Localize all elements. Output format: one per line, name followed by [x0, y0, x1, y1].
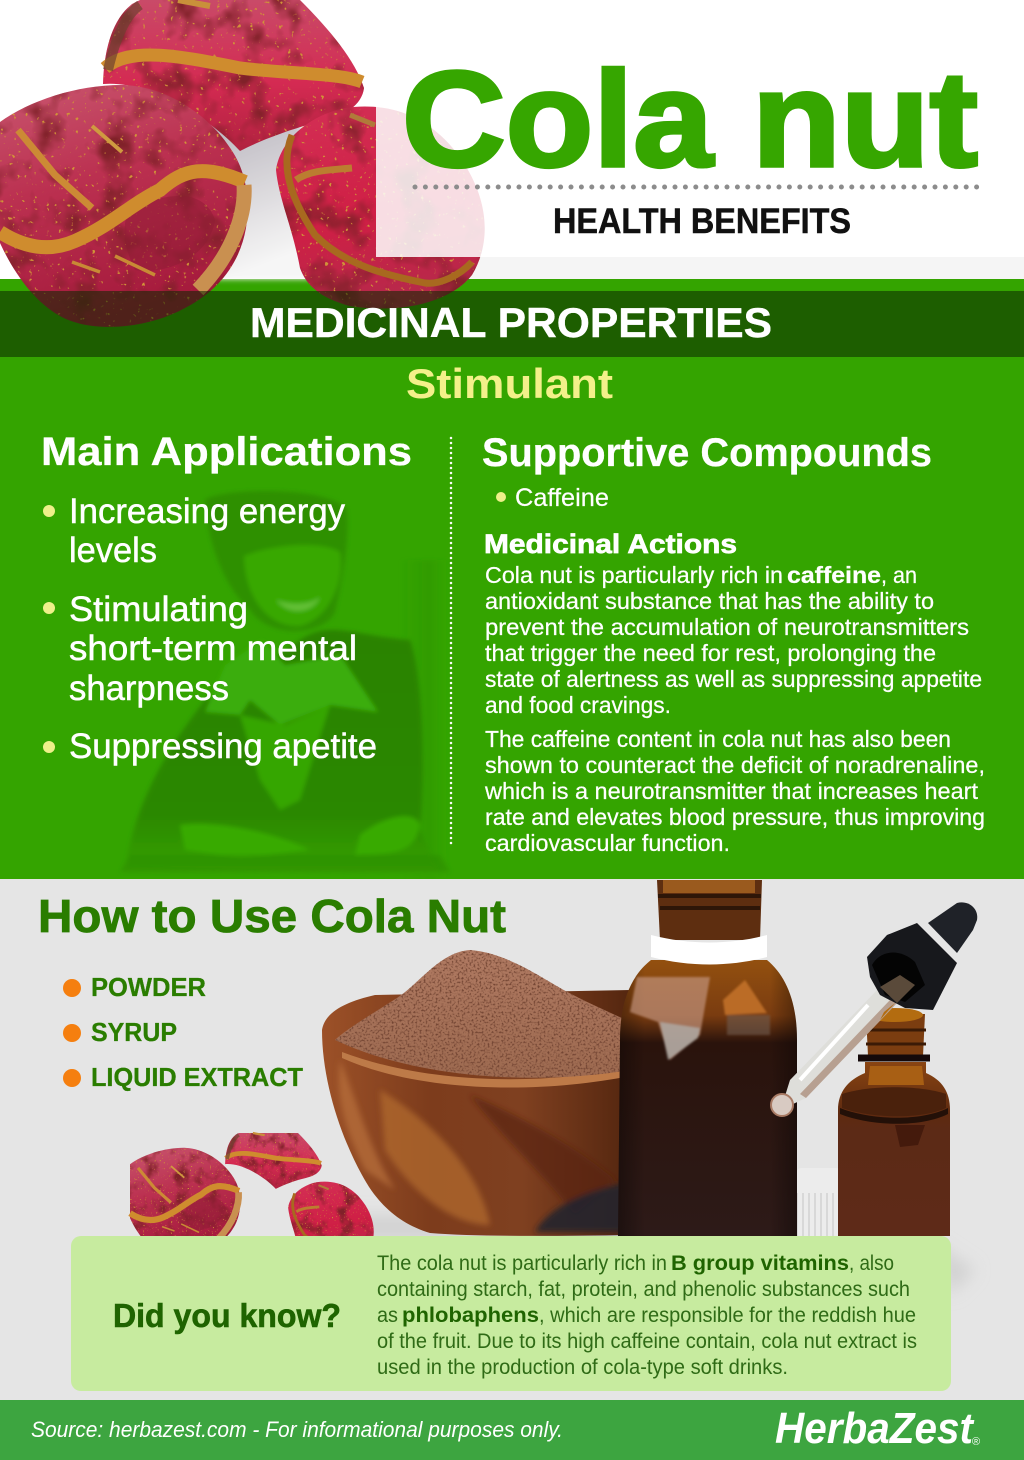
- cola nut shadow: [200, 110, 310, 279]
- section banner: [0, 291, 1024, 357]
- subtitle: HEALTH BENEFITS: [553, 202, 851, 241]
- dotted title divider: [415, 184, 977, 190]
- paragraph one: , an: [881, 562, 917, 588]
- title: [402, 43, 978, 195]
- paragraph one: caffeine: [787, 562, 881, 588]
- callout text: of the fruit. Due to its high caffeine contain, cola nut extract is: [377, 1329, 917, 1353]
- property label: Stimulant: [406, 360, 613, 407]
- paragraph two: shown to counteract the deficit of noradrenaline,: [485, 752, 985, 778]
- application: mental sharpness: sharpness: [69, 669, 229, 708]
- source note: Source: herbazest.com - For informational purposes only.: [31, 1417, 563, 1442]
- header background: [0, 0, 1024, 279]
- callout text: B group vitamins: [671, 1251, 849, 1275]
- logo: HerbaZest: [775, 1404, 975, 1453]
- application: energy: [43, 492, 345, 570]
- paragraph one: state of alertness as well as suppressing appetite: [485, 666, 982, 692]
- paragraph one: Cola nut is particularly rich in: [485, 562, 783, 588]
- application: mental sharpness: [43, 590, 357, 708]
- compound item: Caffeine: [515, 484, 609, 512]
- paragraph two: rate and elevates blood pressure, thus improving: [485, 804, 985, 830]
- panel: main applications: [41, 430, 412, 766]
- paragraph two: [484, 726, 985, 856]
- paragraph one: that trigger the need for rest, prolonging the: [485, 640, 936, 666]
- green band: [0, 279, 1024, 879]
- photo: smiling woman at keyboard, green tint: [120, 491, 450, 878]
- application: appetite: Suppressing apetite: [69, 727, 377, 766]
- logo: ®: [972, 1436, 980, 1448]
- form: liquid extract: LIQUID EXTRACT: [91, 1062, 303, 1092]
- title: nut: [752, 43, 978, 195]
- callout: did you know: [71, 1236, 951, 1391]
- image: small cola nuts: [130, 1133, 374, 1265]
- callout text: [377, 1251, 917, 1379]
- paragraph one: prevent the accumulation of neurotransmitters: [485, 614, 969, 640]
- heading: Supportive Compounds: [482, 431, 932, 475]
- paragraph one: antioxidant substance that has the ability to: [485, 588, 934, 614]
- heading: how to use: How to Use Cola Nut: [38, 890, 506, 942]
- application: energy: Increasing energy: [69, 492, 345, 531]
- paragraph two: cardiovascular function.: [485, 830, 730, 856]
- image: small amber dropper bottle: [838, 1008, 950, 1236]
- application: mental sharpness: Stimulating: [69, 590, 248, 629]
- callout text: , also: [849, 1251, 894, 1275]
- photo: three cola nuts: [0, 0, 485, 327]
- faint strip under title: [376, 257, 1024, 279]
- heading: Main Applications: [41, 430, 412, 474]
- form: syrup: SYRUP: [91, 1017, 177, 1047]
- callout text: , which are responsible for the reddish hue: [539, 1303, 916, 1327]
- image: large amber syrup bottle: [618, 880, 797, 1236]
- paragraph one: and food cravings.: [485, 692, 671, 718]
- banner heading: MEDICINAL PROPERTIES: [250, 299, 772, 346]
- image: white bottle cap: [797, 1168, 840, 1237]
- callout text: containing starch, fat, protein, and phenolic substances such: [377, 1277, 910, 1301]
- subheading: Medicinal Actions: [484, 529, 737, 559]
- footer: [0, 1400, 1024, 1460]
- how to use background: [0, 879, 1024, 1400]
- image: glass dropper: [771, 902, 977, 1116]
- callout text: as: [377, 1303, 398, 1327]
- callout text: used in the production of cola-type soft drinks.: [377, 1355, 788, 1379]
- panel: supportive compounds: [482, 431, 985, 856]
- paragraph one: [485, 562, 982, 718]
- application: energy: levels: [69, 531, 157, 570]
- form: powder: POWDER: [91, 972, 206, 1002]
- paragraph two: The caffeine content in cola nut has also been: [485, 726, 951, 752]
- callout text: The cola nut is particularly rich in: [377, 1251, 667, 1275]
- list: forms: [63, 972, 303, 1092]
- application: mental sharpness: short-term mental: [69, 629, 357, 668]
- translucent title backing: [376, 107, 1024, 257]
- title: Cola: [402, 43, 714, 195]
- callout text: phlobaphens: [402, 1303, 539, 1327]
- image: wooden bowl of powder: [322, 950, 630, 1236]
- photo shadows: [330, 1215, 975, 1295]
- callout heading: Did you know?: [113, 1297, 341, 1334]
- paragraph two: which is a neurotransmitter that increases heart: [484, 778, 979, 804]
